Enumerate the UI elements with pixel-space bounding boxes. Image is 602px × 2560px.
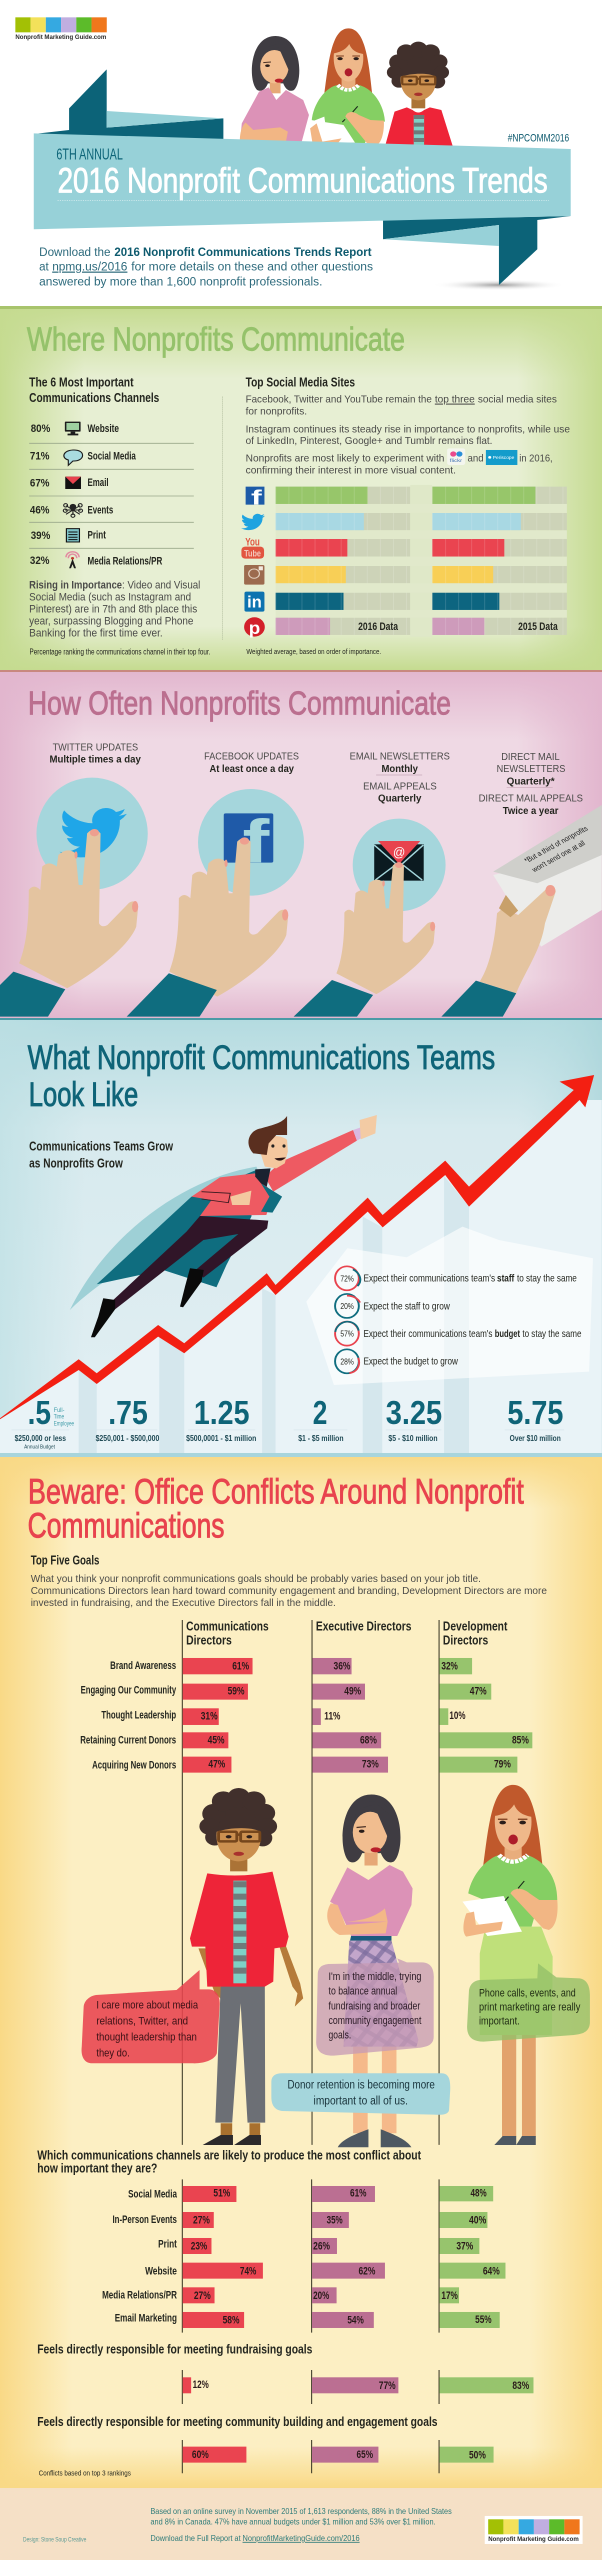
callout: expectations xyxy=(306,1227,593,1385)
speech bubble: executive director: community engagement xyxy=(329,2016,422,2027)
speech bubble: development director: important. xyxy=(479,2016,520,2027)
text block: rising in importance: Banking for the first time ever. xyxy=(29,628,163,639)
heading xyxy=(28,1038,495,1113)
column headings: Executive Directors xyxy=(316,1620,411,1634)
subheading: fundraising: Feels directly responsible for meeting fundraising goals xyxy=(37,2342,312,2357)
text block: social media xyxy=(246,394,570,476)
column headings: Directors xyxy=(443,1634,488,1648)
callout: expectations: Expect their communications team's xyxy=(363,1273,495,1284)
caption: twitter: TWITTER UPDATES xyxy=(53,742,138,753)
text block: goals intro: invested in fundraising, and the Executive Directors fall in the middle. xyxy=(31,1598,336,1609)
bar chart: conflict channels: 17% xyxy=(441,2291,458,2302)
text block: rising in importance: year, surpassing Blogging and Phone xyxy=(29,616,193,627)
bar chart: conflict channels: 27% xyxy=(194,2291,211,2302)
bar chart: top five goals: 68% xyxy=(360,1735,377,1746)
subheading xyxy=(29,1140,173,1170)
speech bubble: executive director: goals. xyxy=(329,2030,351,2041)
shadow under ribbon xyxy=(432,279,566,291)
bar chart: top five goals: 47% xyxy=(470,1686,487,1697)
caption: direct mail: DIRECT MAIL xyxy=(501,752,560,763)
list: six channels: 71% xyxy=(30,449,50,462)
text block: social media: for nonprofits. xyxy=(246,406,307,417)
callout: donor retention xyxy=(271,2073,450,2115)
bar chart: conflict channels: 40% xyxy=(469,2215,486,2226)
text block: rising in importance: Rising in Importance xyxy=(29,580,122,591)
column headings xyxy=(186,1620,508,1648)
bar chart: conflict channels: Email Marketing xyxy=(115,2313,177,2324)
speech bubble: executive director: to balance annual xyxy=(329,1986,397,1997)
caption: email: Monthly xyxy=(381,764,419,775)
illustration: hand and sleeve 3 xyxy=(294,862,435,1017)
subheading: conflict channels: Which communications channels are likely to produce the most conflict about xyxy=(37,2148,421,2162)
illustration: paper mail in hand: won't send one at all xyxy=(530,839,587,874)
icon: flickr xyxy=(447,448,465,465)
caption: email: EMAIL NEWSLETTERS xyxy=(350,751,450,762)
bar chart: conflict channels: 55% xyxy=(475,2315,492,2326)
list: six channels: 32% xyxy=(30,554,50,567)
text block: rising in importance: Pinterest) are in 7th and 8th place this xyxy=(29,604,197,615)
speech bubble: communications director: they do. xyxy=(96,2046,130,2059)
bar chart: community responsibility: 65% xyxy=(357,2450,373,2461)
bar chart: fundraising responsibility: 12% xyxy=(193,2380,209,2391)
bar chart: conflict channels xyxy=(102,2186,505,2328)
list: six channels: Print xyxy=(88,528,106,541)
list: six channels: Website xyxy=(88,422,119,435)
bar chart: community responsibility xyxy=(182,2440,494,2473)
text block: rising in importance: Social Media (such as Instagram and xyxy=(29,592,191,603)
panel: beware office conflicts xyxy=(0,1457,602,2488)
column headings: Directors xyxy=(186,1634,232,1648)
bar chart: conflict channels: 26% xyxy=(313,2241,330,2252)
stats: full-time employees by budget: $500,0001 - $1 million xyxy=(186,1434,256,1443)
bar chart: conflict channels: 51% xyxy=(213,2188,230,2199)
bar chart: top five goals: 31% xyxy=(201,1711,218,1722)
heading: Look Like xyxy=(29,1075,138,1113)
bar chart: fundraising responsibility: 83% xyxy=(512,2381,529,2392)
title xyxy=(56,145,549,201)
caption: direct mail xyxy=(479,752,583,817)
stats: full-time employees by budget: $5 - $10 million xyxy=(388,1434,438,1443)
speech bubble: communications director xyxy=(82,1970,220,2063)
stats: full-time employees by budget: Annual Budget xyxy=(24,1444,55,1450)
intro text: Download the xyxy=(39,245,111,259)
bar chart: top five goals: 36% xyxy=(334,1661,350,1672)
bar chart: top five goals: 49% xyxy=(344,1686,361,1697)
callout: expectations: staff xyxy=(497,1273,515,1284)
stats: full-time employees by budget: Full- xyxy=(54,1407,64,1414)
caption: direct mail: Twice a year xyxy=(503,806,559,817)
stats: full-time employees by budget: Employee xyxy=(54,1421,74,1427)
callout: expectations: 57% xyxy=(340,1329,354,1338)
bar chart: conflict channels: 48% xyxy=(471,2188,487,2199)
title: 6TH ANNUAL xyxy=(56,145,123,163)
caption: email xyxy=(350,751,450,804)
footnote: social: Weighted average, based on order of importance. xyxy=(246,647,381,656)
icon: email circle: @ xyxy=(393,846,405,859)
callout: expectations: 20% xyxy=(340,1302,354,1311)
bar chart: top social media sites: 2016 Data xyxy=(358,620,398,633)
column headings: Communications xyxy=(186,1620,269,1634)
list: six channels: Social Media xyxy=(88,449,136,462)
icon: youtube xyxy=(241,537,264,559)
icon: periscope: Periscope xyxy=(493,455,514,461)
illustration: flying superhero xyxy=(70,1115,377,1337)
list: six channels: 39% xyxy=(31,529,50,542)
bar chart: fundraising responsibility: 77% xyxy=(379,2381,396,2392)
speech bubble: development director xyxy=(467,1963,590,2042)
intro text: for more details on these and other questions xyxy=(131,260,373,273)
text block: goals intro: What you think your nonprofit communications goals should be probably varies based on your job title. xyxy=(31,1574,481,1585)
area under growth line xyxy=(0,1100,602,1456)
text block: social media: in 2016, xyxy=(519,453,553,464)
ribbon: main banner xyxy=(34,133,571,229)
subheading: conflict channels xyxy=(37,2148,421,2175)
bar chart: conflict channels: Print xyxy=(158,2239,177,2250)
stats: full-time employees by budget: Time xyxy=(54,1414,64,1420)
logo: Nonprofit Marketing Guide: Nonprofit Marketing Guide.com xyxy=(15,34,106,41)
intro text: npmg.us/2016 xyxy=(52,260,127,273)
logo: footer xyxy=(485,2516,583,2544)
text block: social media: top three xyxy=(435,394,475,405)
subheading: channels xyxy=(29,376,159,406)
stats: full-time employees by budget: .75 xyxy=(108,1393,148,1431)
subheading: channels: Communications Channels xyxy=(29,391,159,406)
bar chart: conflict channels: 74% xyxy=(240,2266,256,2277)
stats: full-time employees by budget: $1 - $5 million xyxy=(298,1434,344,1443)
icon: email circle xyxy=(353,819,446,911)
bar chart: top five goals: 59% xyxy=(228,1686,244,1697)
text block: social media: social media sites xyxy=(478,394,557,405)
stats: full-time employees by budget: 3.25 xyxy=(386,1393,442,1431)
callout: expectations: to stay the same xyxy=(517,1273,577,1284)
panel: header xyxy=(0,0,602,306)
ribbon: back tail left xyxy=(34,69,223,140)
icon: social speech bubble xyxy=(64,450,83,465)
design credit: Design: Stone Soup Creative xyxy=(23,2537,87,2543)
bar chart: fundraising responsibility xyxy=(182,2370,533,2404)
intro text: answered by more than 1,600 nonprofit professionals. xyxy=(39,275,322,288)
subheading: conflict channels: how important they are? xyxy=(37,2161,157,2175)
icon: twitter circle xyxy=(36,778,148,890)
stats: full-time employees by budget: $250,000 or less xyxy=(15,1434,66,1443)
icon: flickr: flickr xyxy=(450,458,462,464)
panel: what nonprofit communications teams look like xyxy=(0,1020,602,1457)
speech bubble: executive director xyxy=(316,1958,434,2056)
subheading: Communications Teams Grow xyxy=(29,1140,173,1153)
speech bubble: executive director: I'm in the middle, trying xyxy=(329,1972,421,1983)
list: six channels: 46% xyxy=(30,503,50,516)
stats: full-time employees by budget: 5.75 xyxy=(507,1393,563,1431)
illustration: paper mail in hand xyxy=(441,805,602,1017)
icon: monitor xyxy=(65,422,81,435)
caption: email: EMAIL APPEALS xyxy=(363,781,437,792)
bar chart: top five goals: 85% xyxy=(512,1735,529,1746)
illustration: communications director xyxy=(190,1788,303,2145)
heading: Communications xyxy=(28,1506,225,1545)
intro text: 2016 Nonprofit Communications Trends Report xyxy=(114,245,372,259)
bar chart: top five goals: Thought Leadership xyxy=(101,1710,176,1721)
callout: expectations: Expect their communications team's xyxy=(363,1329,492,1340)
icon: instagram xyxy=(244,565,264,585)
icon: media tower xyxy=(66,552,79,568)
bar chart: community responsibility: 60% xyxy=(192,2450,209,2461)
list: six channels xyxy=(29,422,194,568)
bar chart: top five goals: 61% xyxy=(232,1661,249,1672)
stats: full-time employees by budget: 1.25 xyxy=(194,1393,249,1431)
callout: expectations: Expect the budget to grow xyxy=(363,1356,458,1367)
illustration: three women xyxy=(240,28,453,147)
bar chart: top five goals: Retaining Current Donors xyxy=(80,1735,176,1746)
bar chart: top five goals xyxy=(80,1658,532,1773)
stats: full-time employees by budget: Over $10 million xyxy=(510,1434,561,1443)
bar chart: top social media sites: 2015 Data xyxy=(518,620,558,633)
list: six channels: Events xyxy=(88,503,113,516)
list: six channels: 67% xyxy=(30,476,50,489)
bar chart: top five goals: 73% xyxy=(362,1759,379,1770)
icon: events network xyxy=(63,504,83,517)
bar chart: conflict channels: 23% xyxy=(191,2241,207,2252)
speech bubble: communications director: I care more about media xyxy=(96,1998,198,2011)
bar chart: conflict channels: Media Relations/PR xyxy=(102,2290,177,2301)
subheading: social media sites: Top Social Media Sites xyxy=(246,376,355,390)
callout: expectations: 72% xyxy=(340,1274,354,1283)
illustration: executive director xyxy=(327,1794,418,2147)
text block: survey details: and 8% in Canada. 47% have annual budgets under $1 million and 53% over $1 million. xyxy=(150,2517,436,2526)
icon: facebook circle xyxy=(198,789,304,896)
bar chart: top five goals: 47% xyxy=(208,1759,225,1770)
subheading: as Nonprofits Grow xyxy=(29,1157,123,1170)
caption: email: Quarterly xyxy=(378,793,422,804)
bar chart: top five goals: Brand Awareness xyxy=(110,1661,176,1672)
icon: pinterest xyxy=(244,617,265,638)
subheading: channels: The 6 Most Important xyxy=(29,376,134,390)
caption: twitter: Multiple times a day xyxy=(50,754,142,765)
bar chart: conflict channels: 58% xyxy=(223,2315,239,2326)
caption: facebook: FACEBOOK UPDATES xyxy=(204,751,299,762)
arrow: growth xyxy=(0,1075,594,1419)
stats: full-time employees by budget xyxy=(12,1393,564,1450)
footnote: channels: Percentage ranking the communications channel in their top four. xyxy=(30,647,210,656)
text block: survey details: Download the Full Report at xyxy=(150,2534,241,2543)
column headings: Development xyxy=(443,1620,508,1634)
text block: social media: and xyxy=(467,453,484,464)
panel: how often nonprofits communicate xyxy=(0,670,602,1020)
hashtag: #NPCOMM2016 xyxy=(508,131,569,144)
icon: twitter xyxy=(241,514,265,530)
list: six channels: Media Relations/PR xyxy=(88,554,162,567)
bar chart: top five goals: 45% xyxy=(208,1735,225,1746)
bar chart: top five goals: Engaging Our Community xyxy=(81,1685,177,1696)
bar chart: conflict channels: 37% xyxy=(456,2241,473,2252)
text block: goals intro xyxy=(31,1574,547,1609)
callout: expectations: budget xyxy=(495,1329,520,1340)
icon: print document xyxy=(66,529,79,542)
speech bubble: executive director: fundraising and broader xyxy=(329,2001,420,2012)
bar chart: conflict channels: 35% xyxy=(327,2215,343,2226)
callout: expectations: Expect the staff to grow xyxy=(363,1301,450,1312)
text block: social media: of LinkedIn, Pinterest, Google+ and Tumblr remains flat. xyxy=(246,436,492,447)
bar chart: conflict channels: 54% xyxy=(347,2315,364,2326)
illustration: hand and sleeve 2 xyxy=(127,837,288,1017)
stats: full-time employees by budget: $250,001 - $500,000 xyxy=(96,1434,159,1443)
bar chart: conflict channels: Social Media xyxy=(128,2189,177,2200)
icon: envelope xyxy=(65,477,81,489)
icon: linkedin: in xyxy=(247,593,262,611)
text block: survey details xyxy=(150,2507,452,2543)
bar chart: conflict channels: 64% xyxy=(483,2266,500,2277)
icon: periscope xyxy=(486,450,517,465)
ribbon: back tail right xyxy=(383,216,571,285)
list: six channels: 80% xyxy=(31,422,50,435)
logo: Nonprofit Marketing Guide xyxy=(15,17,107,41)
caption: twitter xyxy=(50,742,142,765)
stats: full-time employees by budget: 2 xyxy=(313,1393,327,1431)
icon: youtube: You xyxy=(245,537,260,548)
intro text: at xyxy=(39,260,49,273)
icon: pinterest: p xyxy=(249,618,260,638)
callout: expectations: 28% xyxy=(340,1357,354,1366)
callout: donor retention: Donor retention is becoming more xyxy=(287,2077,435,2091)
icon: facebook xyxy=(246,486,264,509)
heading xyxy=(28,1472,524,1545)
speech bubble: communications director: relations, Twitter, and xyxy=(96,2014,188,2027)
text block: rising in importance: : Video and Visual xyxy=(122,580,200,591)
footnote: conflicts: Conflicts based on top 3 rankings xyxy=(39,2469,131,2477)
subheading: top five goals: Top Five Goals xyxy=(31,1553,100,1567)
text block: survey details: NonprofitMarketingGuide.com/2016 xyxy=(243,2534,360,2543)
text block: social media: Nonprofits are most likely to experiment with xyxy=(246,453,444,464)
bar chart: top five goals: 11% xyxy=(324,1711,340,1722)
intro text xyxy=(39,245,373,288)
caption: direct mail: Quarterly* xyxy=(507,776,555,787)
logo: footer: Nonprofit Marketing Guide.com xyxy=(488,2536,579,2543)
bar chart: community responsibility: 50% xyxy=(469,2450,486,2461)
illustration: paper mail in hand: *But a third of nonprofits xyxy=(523,824,590,865)
bar chart: conflict channels: 27% xyxy=(193,2215,210,2226)
bar chart: conflict channels: 61% xyxy=(350,2188,367,2199)
illustration: development director xyxy=(462,1785,558,2145)
text block: rising in importance xyxy=(29,580,200,639)
text block: social media: confirming their interest in more visual content. xyxy=(246,465,456,476)
caption: facebook xyxy=(204,751,299,775)
bar chart: top five goals: 79% xyxy=(494,1759,511,1770)
illustration: hand and sleeve 1 xyxy=(0,829,138,1017)
text block: survey details: Based on an online survey in November 2015 of 1,613 respondents, 88% in the United States xyxy=(150,2507,452,2516)
heading: Where Nonprofits Communicate xyxy=(27,320,405,358)
icon: facebook: f xyxy=(251,486,263,509)
speech bubble: communications director: thought leadership than xyxy=(96,2030,197,2043)
text block: social media: Facebook, Twitter and YouTube remain the xyxy=(246,394,432,405)
bar chart: top five goals: 32% xyxy=(441,1661,458,1672)
list: six channels: Email xyxy=(88,476,109,489)
bar chart: top social media sites xyxy=(276,485,567,637)
bar chart: conflict channels: 20% xyxy=(313,2291,329,2302)
bar chart: conflict channels: In-Person Events xyxy=(112,2215,177,2226)
caption: direct mail: NEWSLETTERS xyxy=(497,764,565,775)
bar chart: conflict channels: 62% xyxy=(358,2266,375,2277)
callout: donor retention: important to all of us. xyxy=(314,2094,408,2107)
caption: facebook: At least once a day xyxy=(210,764,295,775)
panel: where nonprofits communicate xyxy=(0,306,602,670)
icon: youtube: Tube xyxy=(244,549,261,559)
stats: full-time employees by budget: .5 xyxy=(28,1393,51,1431)
icon: facebook circle: f xyxy=(243,808,270,877)
panel: footer xyxy=(0,2488,602,2560)
bar chart: top five goals: Acquiring New Donors xyxy=(92,1760,176,1771)
bar chart: top five goals: 10% xyxy=(449,1711,466,1722)
bar chart: conflict channels: Website xyxy=(145,2266,177,2277)
